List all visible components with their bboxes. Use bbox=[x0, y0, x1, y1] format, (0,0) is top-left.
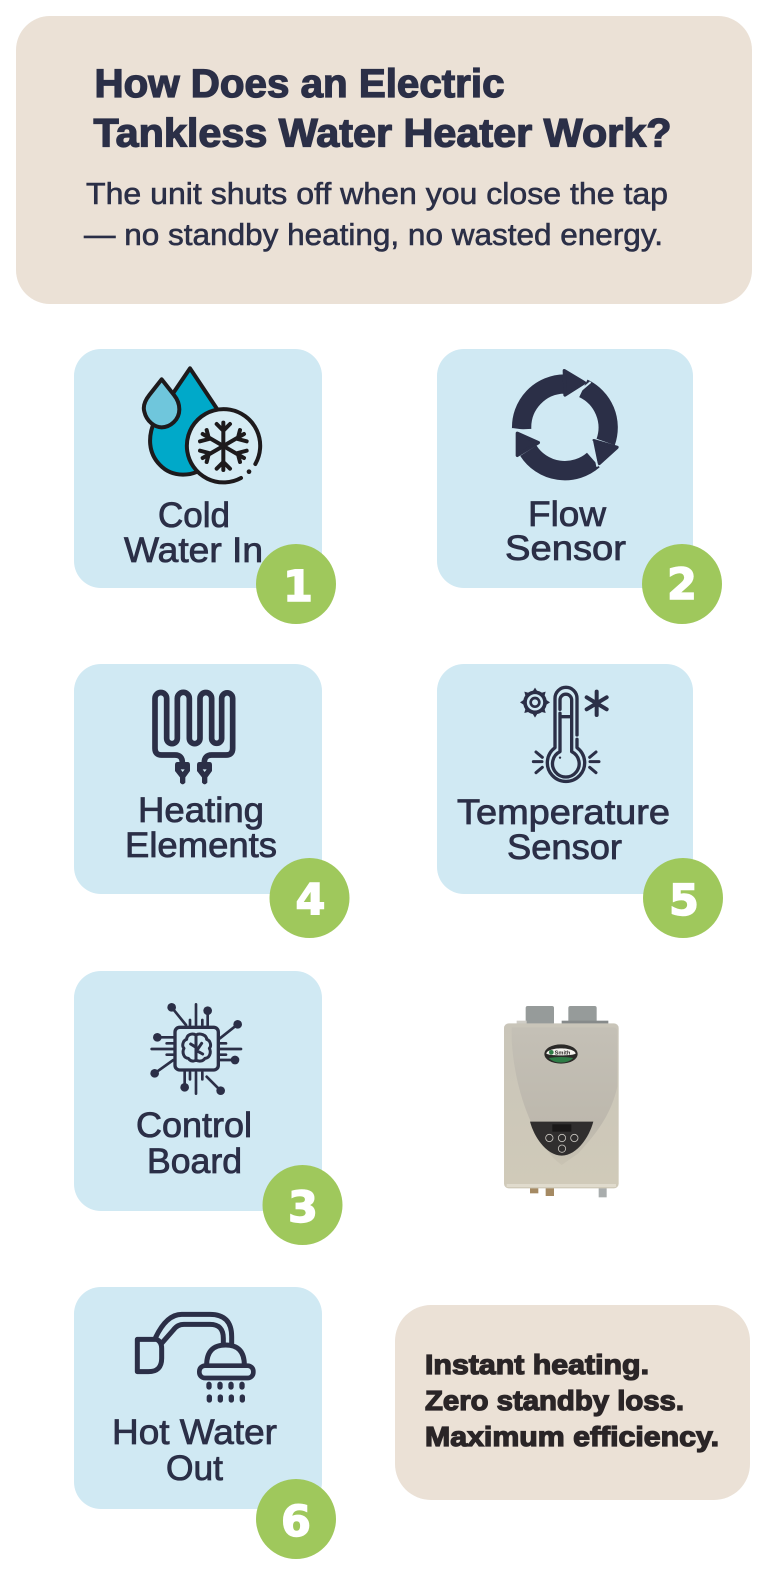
label bbox=[125, 791, 277, 865]
label: Hot Water bbox=[112, 1413, 277, 1452]
bottom connectors bbox=[530, 1187, 607, 1197]
benefits text bbox=[425, 1349, 719, 1452]
heater body bbox=[504, 1023, 619, 1188]
benefits text: Maximum efficiency. bbox=[425, 1421, 719, 1452]
number badge 5: 5 bbox=[669, 876, 699, 926]
label: Out bbox=[166, 1449, 223, 1488]
subtitle: — no standby heating, no wasted energy. bbox=[84, 218, 663, 252]
icon: water drops with snowflake bbox=[144, 368, 260, 483]
number badge 5 bbox=[643, 858, 723, 938]
label: Water In bbox=[124, 531, 263, 570]
subtitle: The unit shuts off when you close the tap bbox=[86, 177, 668, 211]
label: Board bbox=[147, 1142, 242, 1181]
title: Tankless Water Heater Work? bbox=[94, 112, 672, 156]
label: Flow bbox=[528, 495, 607, 534]
number badge 3: 3 bbox=[288, 1183, 318, 1233]
panel: step 4 heating elements bbox=[74, 664, 350, 938]
panel: step 2 flow sensor bbox=[437, 349, 722, 624]
title bbox=[94, 62, 672, 156]
number badge 6: 6 bbox=[281, 1497, 311, 1547]
label: Heating bbox=[138, 791, 264, 830]
icon: heating coil bbox=[155, 692, 233, 784]
label: Sensor bbox=[505, 529, 626, 568]
icon: shower head bbox=[137, 1314, 253, 1403]
title: How Does an Electric bbox=[94, 62, 504, 106]
illustration: tankless water heater unit bbox=[504, 1006, 619, 1197]
benefits text: Zero standby loss. bbox=[425, 1385, 684, 1416]
benefits text: Instant heating. bbox=[425, 1349, 649, 1380]
icon: circuit chip with brain bbox=[150, 1003, 242, 1095]
panel: key benefits callout bbox=[395, 1305, 750, 1500]
label: Control bbox=[136, 1106, 252, 1145]
icon: thermometer with sun and snowflake bbox=[520, 687, 607, 781]
label bbox=[457, 793, 670, 867]
label bbox=[112, 1413, 277, 1488]
number badge 6 bbox=[256, 1479, 336, 1559]
label bbox=[505, 495, 626, 568]
number badge 1: 1 bbox=[283, 562, 313, 612]
panel: step 5 temperature sensor bbox=[437, 664, 723, 938]
label: Cold bbox=[158, 496, 230, 535]
label: Elements bbox=[125, 826, 277, 865]
brand logo bbox=[544, 1044, 578, 1064]
panel: step 6 hot water out bbox=[74, 1287, 336, 1559]
panel: step 3 control board bbox=[74, 971, 342, 1245]
number badge 1 bbox=[256, 544, 336, 624]
control panel bbox=[530, 1122, 593, 1156]
panel: step 1 cold water in bbox=[74, 349, 336, 624]
number badge 2 bbox=[642, 544, 722, 624]
subtitle bbox=[84, 177, 668, 252]
icon: circular arrows bbox=[512, 371, 617, 471]
top vent pipes bbox=[517, 1006, 608, 1025]
panel: header bbox=[16, 16, 752, 304]
label bbox=[124, 496, 263, 570]
brand logo: Smith bbox=[555, 1050, 571, 1056]
number badge 3 bbox=[262, 1165, 342, 1245]
label: Temperature bbox=[457, 793, 670, 832]
number badge 4 bbox=[270, 858, 350, 938]
number badge 4: 4 bbox=[296, 875, 325, 925]
number badge 2: 2 bbox=[667, 560, 697, 610]
label bbox=[136, 1106, 252, 1181]
label: Sensor bbox=[507, 828, 622, 867]
